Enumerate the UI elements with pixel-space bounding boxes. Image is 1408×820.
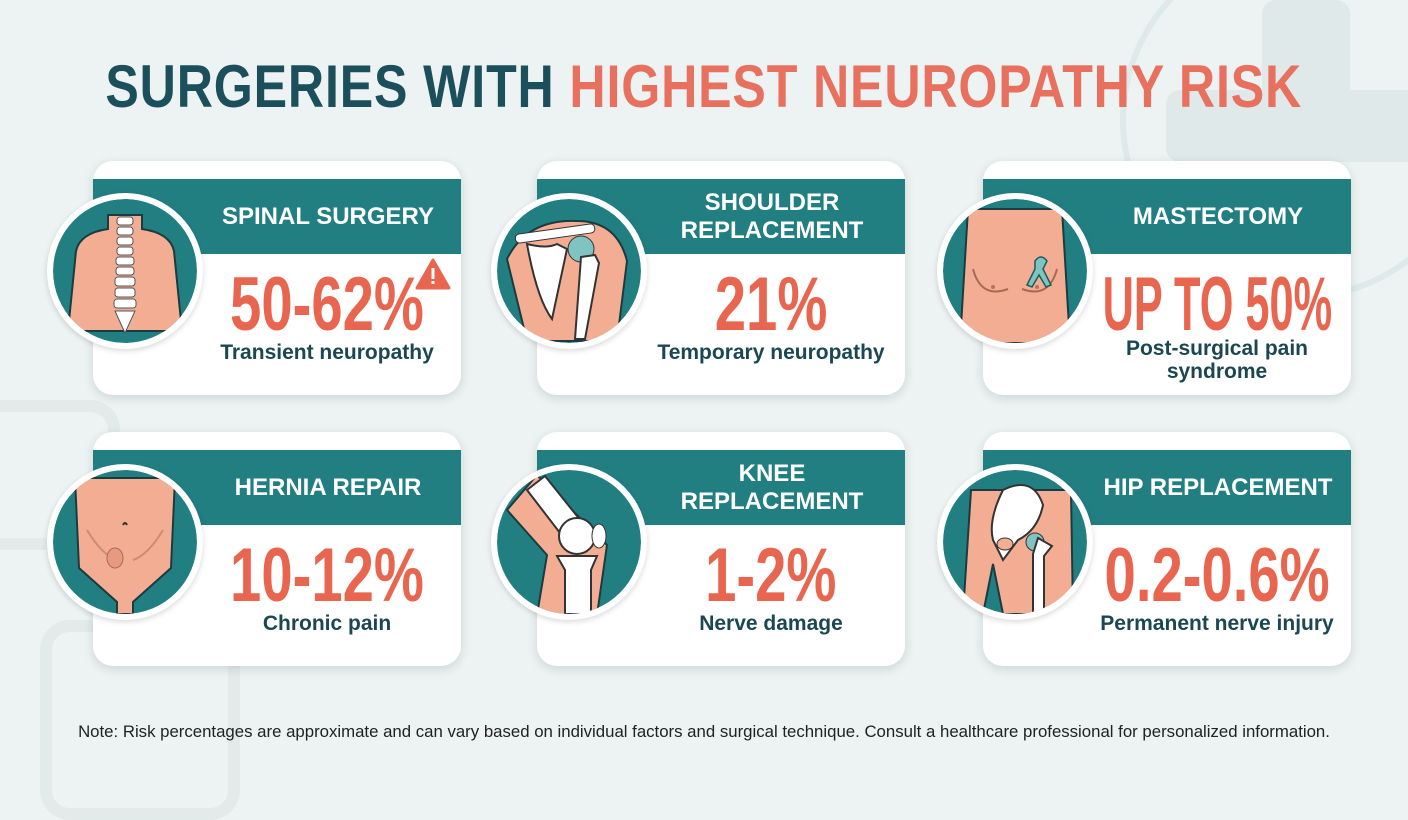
label: syndrome: [1167, 360, 1267, 383]
header band: [983, 179, 1351, 254]
header band: SPINAL SURGERY: [222, 202, 434, 230]
panel: shoulder replacement: [537, 161, 905, 395]
panel: knee replacement: [537, 432, 905, 666]
label: Nerve damage: [699, 612, 843, 635]
footer note: Note: Risk percentages are approximate and can vary based on individual factors and surgical technique. Consult a healthcare professional for personalized information.: [78, 722, 1330, 741]
stat: 50-62%: [230, 262, 424, 347]
header band: [983, 450, 1351, 525]
title: SURGERIES WITH HIGHEST NEUROPATHY RISK: [106, 53, 1302, 120]
panel: spinal surgery: [93, 161, 461, 395]
panel: hernia repair: [93, 432, 461, 666]
label: Chronic pain: [263, 612, 391, 635]
label: Permanent nerve injury: [1100, 612, 1334, 635]
stat: 0.2-0.6%: [1104, 533, 1330, 618]
icon: shoulder: [491, 193, 647, 349]
stat: 1-2%: [705, 533, 837, 618]
stat: UP TO 50%: [1102, 262, 1332, 347]
icon: hip: [937, 464, 1093, 620]
stat: 10-12%: [230, 533, 424, 618]
label: Post-surgical pain: [1126, 337, 1308, 360]
icon: chest with ribbon: [937, 193, 1093, 349]
label: Temporary neuropathy: [657, 341, 885, 364]
header band: MASTECTOMY: [1133, 202, 1303, 230]
header band: REPLACEMENT: [681, 488, 863, 514]
header band: [93, 179, 461, 254]
header band: REPLACEMENT: [681, 216, 863, 244]
header band: KNEE: [739, 460, 805, 486]
label: [1126, 337, 1308, 383]
header band: [537, 450, 905, 525]
icon: knee: [491, 464, 647, 620]
stat: 21%: [715, 262, 827, 347]
header band: HIP REPLACEMENT: [1104, 474, 1332, 500]
panel: hip replacement: [983, 432, 1351, 666]
header band: [93, 450, 461, 525]
icon: abdomen: [47, 464, 203, 620]
icon: warning: [416, 258, 451, 290]
panel: mastectomy: [983, 161, 1351, 395]
header band: HERNIA REPAIR: [235, 474, 421, 500]
icon: spine back: [47, 193, 203, 349]
header band: SHOULDER: [705, 188, 839, 216]
header band: [537, 179, 905, 254]
label: Transient neuropathy: [220, 341, 434, 364]
